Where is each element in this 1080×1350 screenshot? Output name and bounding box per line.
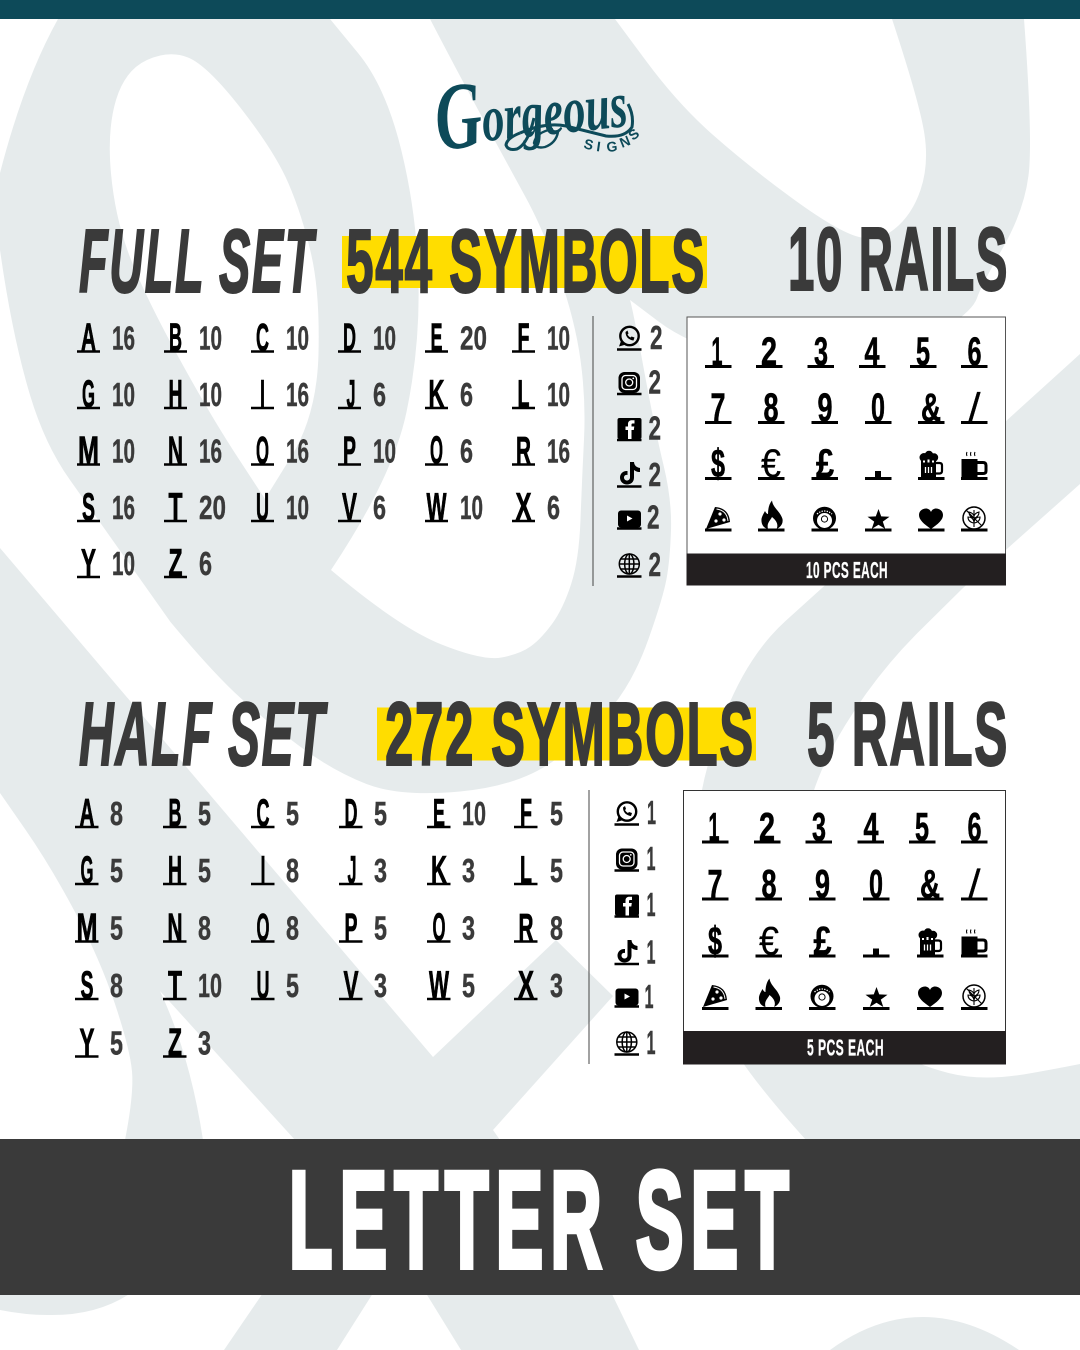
icon: instagram with count bbox=[617, 364, 661, 400]
digits row 1 to 6: 2 bbox=[759, 806, 775, 850]
row S to X bbox=[77, 486, 560, 529]
digits row 7 to slash: 0 bbox=[871, 386, 885, 430]
logo: Gorgeous Signs: orgeous bbox=[478, 68, 631, 156]
row A to F: 5 bbox=[198, 795, 211, 832]
row A to F: A bbox=[81, 316, 96, 360]
digits row 7 to slash: / bbox=[968, 862, 981, 906]
row A to F: 10 bbox=[547, 319, 570, 356]
row A to F: F bbox=[518, 316, 530, 360]
row G to L: 6 bbox=[373, 376, 386, 413]
digits row 7 to slash: 9 bbox=[815, 862, 830, 906]
currency and drinks row: £ bbox=[814, 920, 832, 964]
currency and drinks row bbox=[702, 920, 988, 964]
digits row 7 to slash: 9 bbox=[818, 386, 832, 430]
row M to R: P bbox=[344, 906, 358, 950]
row Y to Z: Y bbox=[81, 542, 96, 585]
digits row 7 to slash: 0 bbox=[869, 862, 883, 906]
row M to R: 8 bbox=[550, 909, 563, 946]
digits row 7 to slash: 8 bbox=[764, 386, 778, 430]
digits row 1 to 6: 6 bbox=[968, 330, 982, 374]
divider: full set bbox=[592, 316, 594, 586]
icon: instagram with count: 2 bbox=[648, 364, 661, 400]
row M to R: 16 bbox=[199, 432, 222, 469]
row G to L: L bbox=[518, 373, 530, 416]
row S to X: X bbox=[516, 486, 532, 529]
icons row: pizza, fire, donut, star, heart, wheat bbox=[705, 500, 988, 530]
row G to L: J bbox=[346, 373, 356, 416]
logo: Gorgeous Signs bbox=[430, 45, 642, 171]
text: 1 bbox=[647, 794, 656, 831]
bottom banner bbox=[0, 1139, 1080, 1297]
row G to L: 3 bbox=[462, 852, 475, 889]
row G to L: J bbox=[348, 849, 356, 892]
row G to L: 5 bbox=[550, 852, 563, 889]
row S to X: W bbox=[426, 486, 447, 529]
icon: facebook with count: 2 bbox=[648, 410, 661, 446]
digits row 1 to 6 bbox=[705, 330, 988, 374]
row G to L: H bbox=[168, 849, 182, 892]
row M to R: 8 bbox=[286, 909, 299, 946]
row S to X: X bbox=[518, 964, 534, 1007]
footer: 10 pcs each: 10 PCS EACH bbox=[806, 557, 888, 583]
digits row 1 to 6: 3 bbox=[812, 806, 826, 850]
row A to F: 5 bbox=[550, 795, 563, 832]
row M to R: 5 bbox=[110, 909, 123, 946]
row G to L: K bbox=[431, 849, 447, 892]
icons row: pizza, fire, donut, star, heart, wheat bbox=[702, 978, 988, 1008]
panel: half set social icons: 1 bbox=[646, 934, 656, 970]
row A to F: 8 bbox=[110, 795, 123, 832]
digits row 7 to slash: 8 bbox=[762, 862, 776, 906]
row M to R: 6 bbox=[460, 432, 473, 469]
row M to R: M bbox=[76, 906, 98, 950]
row S to X: U bbox=[256, 486, 269, 529]
row M to R bbox=[75, 912, 562, 943]
digits row 1 to 6 bbox=[702, 806, 988, 850]
footer: 5 pcs each bbox=[683, 1031, 1006, 1064]
row M to R: N bbox=[168, 430, 183, 472]
row M to R: M bbox=[78, 430, 99, 472]
row S to X: 3 bbox=[550, 967, 563, 1004]
row S to X: 10 bbox=[198, 967, 222, 1004]
icon: tiktok with count: 2 bbox=[648, 456, 661, 493]
row Y to Z: 6 bbox=[199, 545, 212, 582]
highlight: 544 symbols bbox=[342, 212, 707, 312]
digits row 1 to 6: 1 bbox=[708, 806, 720, 850]
row G to L: 6 bbox=[460, 376, 473, 413]
row G to L: 8 bbox=[286, 852, 299, 889]
digits row 1 to 6: 2 bbox=[761, 330, 777, 374]
row G to L bbox=[75, 849, 563, 892]
panel: half set social icons: 1 bbox=[646, 886, 656, 923]
icon: instagram with count bbox=[614, 840, 656, 877]
row S to X: W bbox=[429, 964, 449, 1007]
footer: 5 pcs each: 5 PCS EACH bbox=[807, 1034, 884, 1060]
row A to F: B bbox=[169, 316, 182, 360]
row A to F: 10 bbox=[199, 319, 222, 356]
row G to L: I bbox=[260, 849, 266, 892]
row A to F bbox=[77, 316, 570, 360]
row Y to Z: Z bbox=[168, 542, 182, 585]
icon: facebook with count bbox=[614, 886, 656, 923]
panel: half set social icons: 1 bbox=[646, 840, 656, 877]
digits row 1 to 6: 3 bbox=[814, 330, 828, 374]
row S to X: T bbox=[168, 964, 182, 1007]
row A to F: 16 bbox=[112, 319, 135, 356]
row A to F: D bbox=[344, 792, 358, 835]
row A to F: D bbox=[343, 316, 356, 360]
digits row 1 to 6: 6 bbox=[968, 806, 982, 850]
row M to R: 8 bbox=[198, 909, 211, 946]
row M to R: 5 bbox=[374, 909, 387, 946]
row S to X: S bbox=[80, 964, 94, 1007]
row G to L: G bbox=[82, 373, 95, 416]
heading: full set: FULL SET bbox=[79, 212, 317, 312]
row M to R: 16 bbox=[286, 432, 309, 469]
row G to L: G bbox=[80, 849, 94, 892]
top bar bbox=[0, 0, 1080, 19]
row S to X: S bbox=[82, 486, 95, 529]
digits row 7 to slash: / bbox=[968, 386, 981, 430]
row G to L: 16 bbox=[286, 376, 309, 413]
row M to R: 3 bbox=[462, 909, 475, 946]
row G to L: I bbox=[260, 373, 265, 416]
panel: half set social icons: 1 bbox=[644, 978, 654, 1015]
panel: half set letter counts bbox=[75, 792, 563, 1064]
panel: full set social icons bbox=[617, 319, 662, 583]
row M to R: 16 bbox=[547, 432, 570, 469]
row G to L bbox=[77, 373, 570, 416]
row Y to Z: Z bbox=[168, 1022, 182, 1064]
icon: whatsapp with count bbox=[617, 319, 662, 356]
digits row 1 to 6: 4 bbox=[864, 806, 879, 850]
row M to R: 10 bbox=[112, 432, 135, 469]
row S to X: 6 bbox=[373, 489, 386, 526]
row M to R bbox=[77, 436, 570, 466]
icon: youtube with count: 2 bbox=[647, 498, 660, 536]
row A to F: C bbox=[256, 792, 270, 835]
panel: half set numbers and symbols bbox=[683, 790, 1006, 1064]
row M to R: O bbox=[256, 430, 269, 472]
row A to F: B bbox=[168, 792, 182, 835]
row M to R: O bbox=[256, 906, 270, 950]
row A to F: F bbox=[520, 792, 532, 835]
row G to L: K bbox=[428, 373, 444, 416]
row S to X: 16 bbox=[112, 489, 135, 526]
row Y to Z: 5 bbox=[110, 1024, 123, 1061]
currency and drinks row: € bbox=[761, 442, 781, 486]
row M to R: 10 bbox=[373, 432, 396, 469]
row G to L: H bbox=[168, 373, 182, 416]
row G to L: 5 bbox=[198, 852, 211, 889]
row Y to Z: 3 bbox=[198, 1024, 211, 1061]
row S to X: V bbox=[344, 964, 358, 1007]
row S to X: U bbox=[256, 964, 270, 1007]
row A to F: 10 bbox=[462, 795, 486, 832]
row S to X: V bbox=[342, 486, 357, 529]
currency and drinks row: £ bbox=[816, 442, 834, 486]
row A to F: C bbox=[256, 316, 269, 360]
digits row 7 to slash: & bbox=[920, 862, 940, 906]
row G to L: 10 bbox=[112, 376, 135, 413]
icon: youtube with count bbox=[617, 498, 660, 536]
digits row 7 to slash: & bbox=[921, 386, 941, 430]
heading: half set: HALF SET bbox=[79, 685, 328, 785]
row G to L: L bbox=[520, 849, 532, 892]
digits row 1 to 6: 5 bbox=[916, 330, 930, 374]
row S to X: T bbox=[168, 486, 183, 529]
row M to R: R bbox=[516, 430, 531, 472]
currency and drinks row: $ bbox=[711, 442, 725, 486]
row Y to Z: Y bbox=[80, 1022, 94, 1064]
row M to R: Q bbox=[430, 430, 443, 472]
row S to X: 6 bbox=[547, 489, 560, 526]
row A to F: 20 bbox=[460, 319, 487, 356]
digits row 7 to slash: 7 bbox=[708, 862, 722, 906]
logo: Gorgeous Signs: SIGNS bbox=[582, 125, 642, 155]
row A to F: 5 bbox=[374, 795, 387, 832]
footer: 10 pcs each bbox=[686, 554, 1006, 586]
panel: half set social icons bbox=[614, 794, 656, 1061]
row M to R: Q bbox=[432, 906, 446, 950]
row S to X: 3 bbox=[374, 967, 387, 1004]
highlight: 544 symbols: 544 SYMBOLS bbox=[346, 212, 706, 312]
row Y to Z bbox=[77, 542, 212, 585]
digits row 7 to slash: 7 bbox=[710, 386, 726, 430]
row S to X: 10 bbox=[286, 489, 309, 526]
highlight: 272 symbols bbox=[377, 685, 756, 785]
row A to F: A bbox=[80, 792, 94, 835]
icon: tiktok with count bbox=[617, 456, 661, 493]
row A to F: 10 bbox=[286, 319, 309, 356]
digits row 1 to 6: 1 bbox=[712, 330, 722, 374]
row A to F bbox=[75, 792, 563, 835]
icon: tiktok with count bbox=[614, 934, 656, 970]
row A to F: 10 bbox=[373, 319, 396, 356]
row M to R: N bbox=[168, 906, 182, 950]
row S to X: 20 bbox=[199, 489, 226, 526]
currency and drinks row: $ bbox=[708, 920, 722, 964]
row G to L: 10 bbox=[199, 376, 222, 413]
row S to X: 5 bbox=[462, 967, 475, 1004]
row Y to Z: 10 bbox=[112, 545, 135, 582]
icon: youtube with count bbox=[614, 978, 654, 1015]
row A to F: E bbox=[433, 792, 445, 835]
divider: half set bbox=[588, 790, 590, 1064]
row G to L: 3 bbox=[374, 852, 387, 889]
icon: facebook with count bbox=[617, 410, 661, 446]
row S to X: 8 bbox=[110, 967, 123, 1004]
row A to F: 5 bbox=[286, 795, 299, 832]
icon: globe with count bbox=[614, 1024, 656, 1061]
icon: whatsapp with count: 2 bbox=[650, 319, 662, 356]
digits row 1 to 6: 5 bbox=[915, 806, 929, 850]
currency and drinks row bbox=[705, 442, 988, 486]
panel: half set social icons: 1 bbox=[646, 1024, 656, 1061]
row S to X bbox=[75, 964, 563, 1007]
row Y to Z bbox=[75, 1022, 211, 1064]
digits row 1 to 6: 4 bbox=[864, 330, 880, 374]
row S to X: 10 bbox=[460, 489, 483, 526]
icon: globe with count: 2 bbox=[648, 546, 661, 583]
currency and drinks row: € bbox=[759, 920, 779, 964]
row S to X: 5 bbox=[286, 967, 299, 1004]
row G to L: 5 bbox=[110, 852, 123, 889]
row A to F: E bbox=[430, 316, 442, 360]
panel: full set letter counts bbox=[77, 316, 570, 585]
icon: globe with count bbox=[617, 546, 661, 583]
row G to L: 10 bbox=[547, 376, 570, 413]
row M to R: R bbox=[518, 906, 534, 950]
highlight: 272 symbols: 272 SYMBOLS bbox=[385, 685, 755, 785]
logo: Gorgeous Signs: G bbox=[430, 61, 487, 171]
icon: whatsapp with count bbox=[614, 794, 656, 831]
digits row 7 to slash bbox=[702, 862, 988, 906]
panel: full set numbers and symbols bbox=[686, 317, 1006, 586]
digits row 7 to slash bbox=[705, 386, 988, 430]
row M to R: P bbox=[343, 430, 356, 472]
